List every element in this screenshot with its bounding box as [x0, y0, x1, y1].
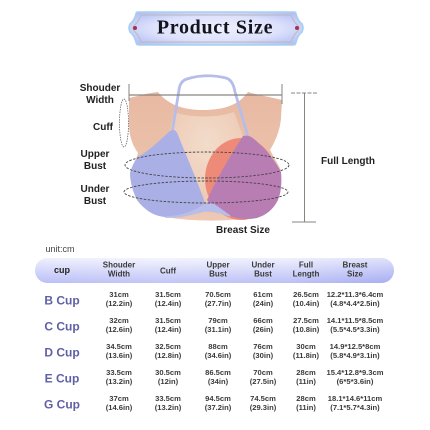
table row: B Cup: 12.2*11.3*6.4cm — [327, 290, 383, 299]
table row: C Cup: 31.5cm — [155, 316, 181, 325]
table row: E Cup: 15.4*12.8*9.3cm — [326, 368, 384, 377]
table row: C Cup: C Cup — [44, 320, 80, 334]
shoulder width line — [129, 84, 282, 104]
torso — [129, 92, 282, 221]
unit note: unit:cm — [45, 244, 75, 254]
upper bust ellipse — [125, 152, 289, 178]
table row: G Cup: (37.2in) — [205, 403, 231, 412]
table row: D Cup: 34.5cm — [106, 342, 132, 351]
left bra cup — [130, 130, 208, 217]
table header bar — [35, 258, 394, 283]
table row: C Cup: 66cm — [253, 316, 273, 325]
label: shoulder width: Shouder — [80, 83, 120, 94]
table header labels: Length — [293, 270, 319, 279]
table row: C Cup: (5.5*4.5*3.3in) — [330, 325, 380, 334]
table row: G Cup — [44, 394, 382, 412]
table row: G Cup: G Cup — [44, 398, 80, 412]
table row: E Cup: 33.5cm — [106, 368, 132, 377]
right bra cup — [207, 136, 281, 219]
under bust ellipse — [124, 181, 288, 203]
table header labels: cup — [54, 265, 70, 275]
full length line — [291, 93, 318, 222]
table header labels: Full — [299, 261, 313, 270]
table row: D Cup: D Cup — [44, 346, 80, 360]
table row: B Cup: 31.5cm — [155, 290, 181, 299]
table row: C Cup: (12.4in) — [155, 325, 181, 334]
table row: D Cup: 76cm — [253, 342, 273, 351]
table row: D Cup: 32.5cm — [155, 342, 181, 351]
cuff ellipse — [120, 99, 128, 147]
table row: C Cup: (26in) — [253, 325, 273, 334]
label: upper bust: Bust — [84, 161, 106, 172]
table row: G Cup: (11in) — [296, 403, 316, 412]
table row: E Cup: (13.2in) — [106, 377, 132, 386]
table row: G Cup: (29.3in) — [250, 403, 276, 412]
table row: C Cup: (10.8in) — [293, 325, 319, 334]
table row: D Cup — [44, 342, 380, 360]
table row: C Cup: 79cm — [208, 316, 228, 325]
table row: D Cup: (11.8in) — [293, 351, 319, 360]
table row: C Cup: (12.6in) — [106, 325, 132, 334]
label: breast size: Breast Size — [216, 225, 270, 236]
table row: B Cup: (27.7in) — [205, 299, 231, 308]
label: under bust: Under — [81, 184, 109, 195]
title plate — [128, 11, 304, 46]
table header labels — [54, 261, 368, 279]
table row: D Cup: (34.6in) — [205, 351, 231, 360]
table row: B Cup: (4.8*4.4*2.5in) — [330, 299, 380, 308]
table row: D Cup: 14.9*12.5*8cm — [330, 342, 380, 351]
table row: G Cup: 94.5cm — [205, 394, 231, 403]
table header labels: Width — [108, 270, 130, 279]
table row: E Cup: (27.5in) — [250, 377, 276, 386]
bra bottom band — [165, 204, 230, 217]
table header labels: Size — [347, 270, 363, 279]
table row: C Cup — [44, 316, 383, 334]
table row: D Cup: (30in) — [253, 351, 273, 360]
table row: G Cup: (14.6in) — [106, 403, 132, 412]
table row: B Cup: (24in) — [253, 299, 273, 308]
table row: B Cup: B Cup — [44, 294, 80, 308]
table row: C Cup: (31.1in) — [205, 325, 231, 334]
table header labels: Shouder — [103, 261, 135, 270]
title plate: Product Size — [157, 16, 273, 38]
table row: B Cup: (12.2in) — [106, 299, 132, 308]
label: under bust: Bust — [84, 196, 106, 207]
table row: G Cup: 74.5cm — [250, 394, 276, 403]
label: under bust — [81, 184, 110, 207]
table row: G Cup: (13.2in) — [155, 403, 181, 412]
table row: E Cup: (11in) — [296, 377, 316, 386]
table row: E Cup: (34in) — [208, 377, 228, 386]
table header labels: Cuff — [160, 266, 176, 275]
table header labels: Under — [251, 261, 275, 270]
table row: B Cup: 61cm — [253, 290, 273, 299]
table row: G Cup: (7.1*5.7*4.3in) — [330, 403, 380, 412]
label: upper bust — [81, 149, 110, 172]
table row: B Cup: (12.4in) — [155, 299, 181, 308]
table row: B Cup — [44, 290, 383, 308]
breast overlay — [205, 138, 277, 220]
table row: B Cup: (10.4in) — [293, 299, 319, 308]
label: full length: Full Length — [321, 156, 375, 167]
bra straps — [172, 76, 248, 137]
table row: E Cup: E Cup — [45, 372, 79, 386]
table row: G Cup: 37cm — [109, 394, 129, 403]
label: upper bust: Upper — [81, 149, 109, 160]
table row: D Cup: 30cm — [296, 342, 316, 351]
label: shoulder width: Width — [86, 95, 114, 106]
table row: D Cup: (12.8in) — [155, 351, 181, 360]
label: shoulder width — [80, 83, 120, 106]
table header labels: Upper — [206, 261, 230, 270]
table row: E Cup: (12in) — [158, 377, 178, 386]
table row: B Cup: 26.5cm — [293, 290, 319, 299]
table row: D Cup: (13.6in) — [106, 351, 132, 360]
table row: E Cup: 28cm — [296, 368, 316, 377]
table header labels: Bust — [209, 270, 227, 279]
table row: E Cup: 70cm — [253, 368, 273, 377]
table row: D Cup: (5.8*4.9*3.1in) — [330, 351, 380, 360]
label: cuff: Cuff — [93, 122, 113, 133]
table row: C Cup: 27.5cm — [293, 316, 319, 325]
table row: G Cup: 33.5cm — [155, 394, 181, 403]
table row: E Cup: 30.5cm — [155, 368, 181, 377]
table header labels: Breast — [343, 261, 367, 270]
table row: D Cup: 88cm — [208, 342, 228, 351]
product diagram — [119, 74, 317, 222]
table row: E Cup: (6*5*3.6in) — [337, 377, 373, 386]
table row: B Cup: 31cm — [109, 290, 129, 299]
table row: C Cup: 32cm — [109, 316, 129, 325]
table header labels: Bust — [254, 270, 272, 279]
table row: E Cup — [45, 368, 384, 386]
table row: G Cup: 18.1*14.6*11cm — [328, 394, 382, 403]
table row: B Cup: 70.5cm — [205, 290, 231, 299]
table row: E Cup: 86.5cm — [205, 368, 231, 377]
table row: C Cup: 14.1*11.5*8.5cm — [327, 316, 383, 325]
table row: G Cup: 28cm — [296, 394, 316, 403]
